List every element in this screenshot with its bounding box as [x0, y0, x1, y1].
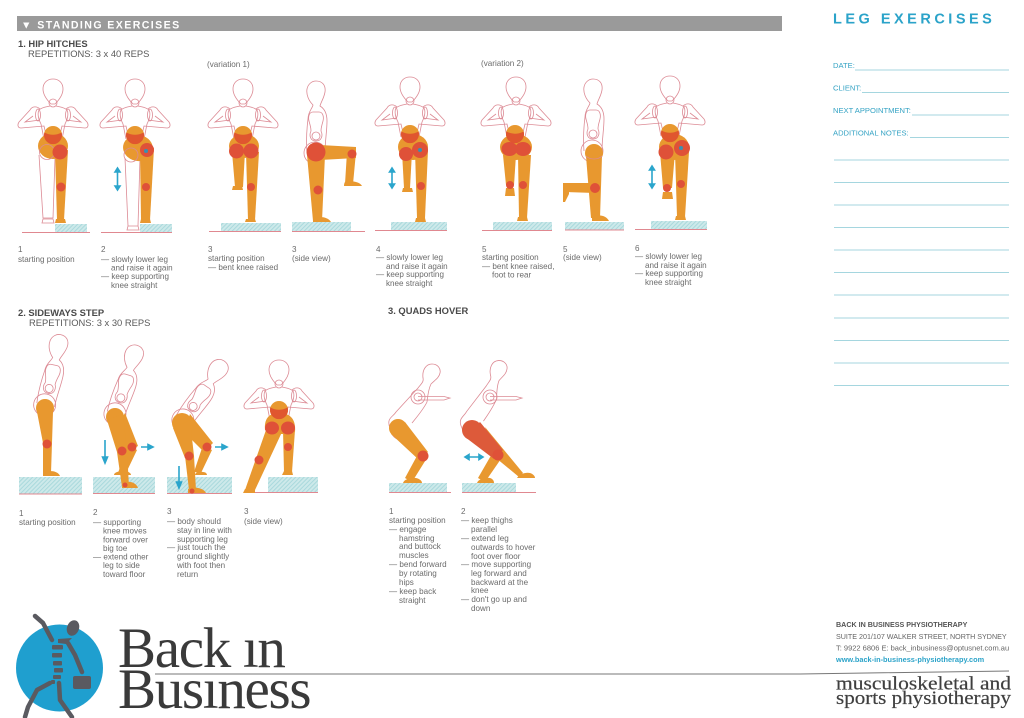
brand name: back in business: Back in [118, 617, 285, 680]
contact details: T: 9922 6806 E: back_inbusiness@optusnet.com.au [836, 644, 1009, 652]
caption: hip hitches step 6: — keep supporting [635, 269, 703, 278]
caption: hip hitches step 2: and raise it again [111, 264, 173, 272]
heading: hip hitches: REPETITIONS: 3 x 40 REPS [28, 48, 149, 59]
caption: sideways step 3: ground slightly [177, 552, 230, 561]
caption: sideways step 3: — body should [167, 517, 221, 526]
contact details: SUITE 201/107 WALKER STREET, NORTH SYDNEY [836, 633, 1007, 641]
caption: quads hover 1: by rotating [399, 569, 437, 578]
caption: quads hover 1: hamstring [399, 534, 435, 543]
caption: hip hitches step 2: 2 [101, 245, 106, 254]
section header bar: standing exercises: ▼ STANDING EXERCISES [21, 20, 181, 32]
heading: sideways step: 2. SIDEWAYS STEP [18, 307, 104, 318]
label: variation 2: (variation 2) [481, 59, 524, 68]
caption: hip hitches step 4: — keep supporting [376, 270, 444, 279]
caption: quads hover 2: down [471, 604, 490, 613]
title: leg exercises: LEG EXERCISES [833, 12, 995, 28]
caption: quads hover 2: 2 [461, 507, 466, 516]
figure: sideways step foot touches ground with arrows [167, 354, 233, 494]
caption: sideways step 2: leg to side [103, 561, 140, 570]
caption: hip hitches step 5: starting position [482, 253, 539, 262]
figure: variation 1 lowered leg with arrow [375, 77, 447, 230]
client form fields and notes lines: ADDITIONAL NOTES: [833, 128, 909, 138]
caption: quads hover 2: backward at the [471, 578, 529, 587]
caption: hip hitches step 6: knee straight [645, 278, 692, 287]
caption: sideways step 3: supporting leg [177, 535, 228, 544]
caption: quads hover 1: — bend forward [389, 560, 447, 569]
tagline: musculoskeletal and sports physiotherapy [836, 674, 1012, 709]
caption: hip hitches step 3 side view: (side view) [292, 254, 331, 263]
figure: variation 2 side view [563, 79, 624, 230]
caption: sideways step 2: 2 [93, 508, 98, 517]
caption: quads hover 2: — move supporting [461, 560, 531, 569]
brand name: back in business [118, 617, 310, 718]
heading: sideways step: REPETITIONS: 3 x 30 REPS [29, 317, 150, 328]
tagline: musculoskeletal and sports physiotherapy: sports physiotherapy [836, 689, 1012, 709]
contact details: www.back-in-business-physiotherapy.com [835, 655, 985, 664]
figure: quads hover starting position [389, 364, 451, 492]
caption: sideways step 2: toward floor [103, 570, 146, 579]
contact details [835, 621, 1009, 664]
caption: quads hover 2: parallel [471, 525, 497, 534]
caption: quads hover 2: — extend leg [461, 534, 509, 543]
logo: blue circle with skeletal figure carrying briefcase [16, 616, 103, 717]
figure: quads hover leg extended with arrow [455, 360, 536, 492]
figure: sideways step front view [243, 360, 318, 493]
caption: sideways step 3: — just touch the [167, 543, 226, 552]
caption: sideways step 3: return [177, 570, 198, 579]
caption: hip hitches step 3: 3 [208, 245, 213, 254]
client form fields and notes lines: DATE: [833, 61, 855, 70]
figure: sideways step knee forward with arrows [93, 342, 155, 494]
caption: quads hover 2: leg forward and [471, 569, 527, 578]
caption: sideways step 1: 1 [19, 509, 24, 518]
caption: hip hitches step 6: 6 [635, 244, 640, 253]
figure: variation 1 bent knee raised [208, 79, 281, 232]
figure: variation 2 lowered leg with arrow [635, 76, 707, 230]
caption: hip hitches step 3: starting position [208, 254, 265, 263]
caption: quads hover 1: — keep back [389, 587, 437, 596]
caption: quads hover 2: — don't go up and [461, 595, 527, 604]
caption: hip hitches step 2: knee straight [111, 281, 158, 290]
caption: hip hitches step 5: — bent knee raised, [482, 262, 554, 271]
caption: quads hover 1: muscles [399, 551, 429, 560]
caption: hip hitches step 4: — slowly lower leg [376, 253, 443, 262]
caption: hip hitches step 3: — bent knee raised [208, 263, 278, 272]
caption: hip hitches step 5 side view: 5 [563, 245, 568, 254]
figure: variation 2 foot to rear [481, 77, 552, 230]
section header bar: standing exercises [17, 16, 782, 32]
caption: quads hover 1: hips [399, 578, 414, 587]
figure: variation 1 side view [292, 81, 365, 232]
caption: sideways step 2: big toe [103, 544, 128, 553]
contact details: BACK IN BUSINESS PHYSIOTHERAPY [836, 621, 968, 629]
caption: quads hover 2: knee [471, 586, 489, 595]
client form fields and notes lines: NEXT APPOINTMENT: [833, 106, 911, 115]
label: variation 1: (variation 1) [207, 60, 250, 69]
caption: sideways step 3 side view: 3 [244, 507, 249, 516]
caption: hip hitches step 2: — keep supporting [101, 272, 169, 281]
caption: quads hover 1: straight [399, 596, 426, 605]
caption: hip hitches step 2: — slowly lower leg [101, 255, 168, 264]
caption: hip hitches step 3 side view: 3 [292, 245, 297, 254]
caption: quads hover 1: — engage [389, 525, 427, 534]
caption: sideways step 2: forward over [103, 536, 148, 544]
caption: sideways step 3: with foot then [176, 561, 225, 570]
caption: quads hover 2: foot over floor [471, 552, 521, 561]
heading: sideways step [18, 307, 150, 328]
heading: quads hover: 3. QUADS HOVER [388, 305, 468, 316]
caption: hip hitches step 5 side view: (side view) [563, 253, 602, 262]
caption: hip hitches step 1: starting position [18, 255, 75, 264]
caption: sideways step 2: — extend other [93, 552, 149, 562]
caption: hip hitches step 6: — slowly lower leg [635, 252, 702, 261]
client form fields and notes lines: CLIENT: [833, 84, 861, 92]
caption: sideways step 3: stay in line with [177, 526, 232, 535]
caption: sideways step 2: — supporting [93, 518, 141, 527]
caption: hip hitches step 5: foot to rear [492, 270, 531, 280]
caption: quads hover 1: 1 [389, 507, 394, 516]
heading: hip hitches: 1. HIP HITCHES [18, 38, 88, 49]
figure: hip hitches starting position [18, 79, 90, 232]
caption: sideways step 3: 3 [167, 507, 172, 516]
caption: hip hitches step 4: knee straight [386, 279, 433, 288]
footer divider line [155, 671, 1009, 674]
client form fields and notes lines [833, 61, 1009, 386]
caption: hip hitches step 4: and raise it again [386, 262, 448, 271]
heading: hip hitches [18, 38, 149, 59]
caption: quads hover 1: and buttock [399, 542, 442, 551]
figure: hip hitches lowered leg with arrow [100, 79, 172, 232]
caption: quads hover 1: starting position [389, 516, 446, 525]
caption: quads hover 2: outwards to hover [471, 543, 536, 552]
caption: hip hitches step 1: 1 [18, 245, 23, 254]
caption: sideways step 1: starting position [19, 518, 76, 527]
caption: hip hitches step 5: 5 [482, 245, 487, 254]
figure: sideways step starting position [19, 332, 82, 494]
caption: hip hitches step 6: and raise it again [645, 261, 707, 270]
caption: quads hover 2: — keep thighs [461, 516, 513, 525]
tagline: musculoskeletal and sports physiotherapy: musculoskeletal and [836, 674, 1012, 694]
caption: sideways step 3 side view: (side view) [244, 517, 283, 526]
caption: sideways step 2: knee moves [103, 526, 147, 536]
caption: hip hitches step 4: 4 [376, 245, 381, 254]
